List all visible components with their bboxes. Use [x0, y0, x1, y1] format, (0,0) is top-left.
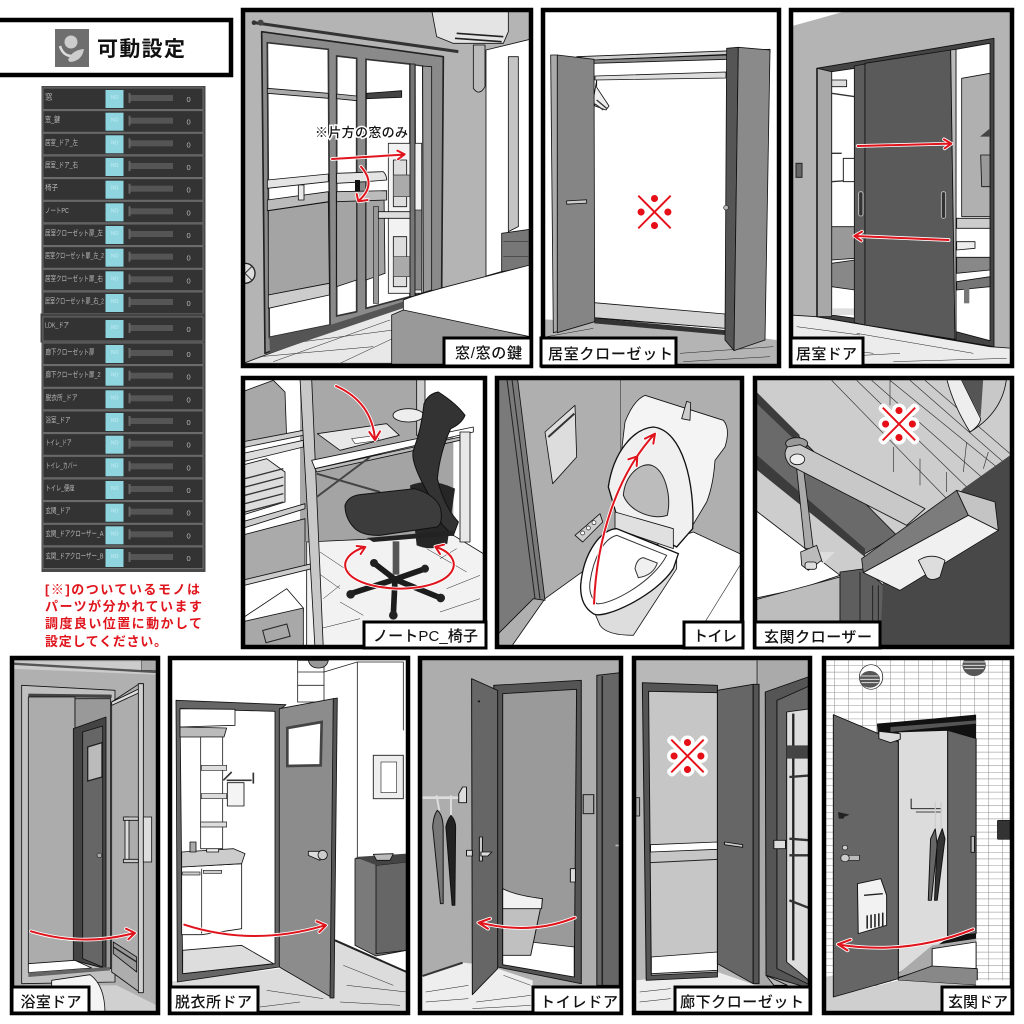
red note: [※]のついているモノは: [45, 582, 200, 597]
row: 廊下クローゼット扉: [43, 343, 203, 364]
row: ノートPC: NO: [111, 208, 119, 214]
label: 浴室ドア: 浴室ドア: [20, 994, 82, 1011]
row: ノートPC: [43, 201, 203, 223]
lamp base: [393, 409, 424, 422]
door: [279, 698, 337, 998]
row: 居室_ドア_右: NO: [111, 163, 119, 169]
row: 椅子: NO: [111, 186, 119, 192]
right opening view: [956, 43, 990, 341]
left opening view: [832, 68, 855, 318]
panel: hallway closet: [632, 657, 813, 1014]
row: 窓: 0: [186, 95, 191, 104]
right folding door: [724, 47, 770, 351]
label: 脱衣所ドア: [170, 987, 258, 1013]
door closer: [879, 731, 900, 743]
row: 居室クローゼット扉_左_2: 居室クローゼット扉_左_2: [45, 250, 104, 260]
row: 浴室_ドア: 0: [186, 418, 191, 427]
title: [0, 20, 231, 75]
row: トイレ_カバー: [43, 456, 203, 478]
row: トイレ_カバー: トイレ_カバー: [46, 461, 78, 470]
arrow: lid raise: [594, 434, 655, 604]
washroom interior: [180, 709, 275, 974]
row: 窓_鍵: [43, 111, 203, 132]
wall tile lines: [832, 380, 1010, 500]
row: 窓_鍵: 0: [186, 118, 191, 127]
row: 廊下クローゼット扉: 廊下クローゼット扉: [46, 346, 95, 356]
raised seat: [608, 427, 693, 549]
red note: 調度良い位置に動かして: [45, 616, 202, 631]
row: 居室クローゼット扉_右_2: 0: [186, 299, 191, 308]
panel: window and window lock: [235, 10, 531, 367]
label: 玄関ドア: [942, 987, 1012, 1013]
panel: morph slider list: [40, 86, 206, 572]
row: 玄関_ドア: [43, 502, 203, 523]
door: [467, 679, 498, 995]
row: 廊下クローゼット扉: NO: [111, 350, 119, 356]
paper holder: [545, 405, 577, 484]
icon: intercom: [998, 820, 1010, 839]
vent hood: [947, 377, 1007, 432]
row: 廊下クローゼット扉: 0: [186, 350, 191, 359]
row: 居室クローゼット扉_右: 0: [186, 276, 191, 285]
row: トイレ_ドア: NO: [111, 441, 119, 447]
row: 玄関_ドアクローザー_A: [43, 524, 203, 546]
laptop: [317, 424, 399, 450]
arrow: door swing: [31, 929, 135, 940]
title: 可動設定: [97, 38, 185, 61]
row: トイレ_ドア: トイレ_ドア: [46, 438, 72, 447]
row: 浴室_ドア: NO: [111, 418, 119, 424]
neighbouring door: [597, 673, 620, 985]
red note: [45, 582, 202, 649]
row: 居室クローゼット扉_左_2: NO: [111, 254, 119, 260]
glass door: [765, 676, 811, 989]
inner door: [73, 717, 106, 969]
label: 玄関クローザー: [755, 622, 880, 648]
row: 廊下クローゼット扉_2: NO: [111, 373, 119, 379]
picture frame: [373, 755, 403, 799]
vents: [859, 655, 986, 689]
row: 窓_鍵: 窓_鍵: [45, 114, 60, 124]
row: 浴室_ドア: 浴室_ドア: [46, 414, 70, 424]
row: 居室クローゼット扉_左: [43, 224, 203, 246]
row: 居室_ドア_左: 居室_ドア_左: [45, 137, 78, 147]
label: 玄関クローザー: 玄関クローザー: [764, 629, 872, 646]
row: トイレ_カバー: 0: [186, 463, 191, 472]
panel: entrance door closer: [753, 377, 1017, 649]
umbrella rack: [423, 787, 467, 905]
row: LDK_ドア: 0: [186, 325, 191, 334]
row: 居室_ドア_左: 0: [186, 140, 191, 149]
label: トイレ: [684, 622, 743, 648]
row: 玄関_ドアクローザー_B: NO: [111, 554, 119, 560]
label: ノートPC_椅子: ノートPC_椅子: [373, 627, 478, 645]
laundry hanger: [367, 91, 402, 99]
outdoor units: [378, 64, 422, 297]
row: 居室クローゼット扉_左: NO: [111, 231, 119, 237]
curtain rail: [252, 20, 458, 52]
row: 窓: NO: [111, 95, 119, 101]
arrow: chair rotation: [345, 545, 454, 589]
reference mark: ※: [876, 399, 922, 452]
row: トイレ_便座: トイレ_便座: [46, 482, 75, 492]
panel: bedroom closet: [540, 7, 783, 367]
row: トイレ_便座: NO: [111, 486, 119, 492]
arrow: slide right: [858, 139, 951, 148]
label: 脱衣所ドア: 脱衣所ドア: [175, 994, 252, 1011]
row: 玄関_ドアクローザー_A: NO: [111, 531, 119, 537]
row: 玄関_ドア: 玄関_ドア: [46, 505, 70, 515]
bed: [392, 265, 530, 367]
row: 居室クローゼット扉_右_2: NO: [111, 299, 119, 305]
row: 脱衣所_ドア: 脱衣所_ドア: [46, 392, 78, 402]
panel: entrance door: [821, 655, 1015, 1014]
label: 浴室ドア: [12, 987, 89, 1013]
row: 居室_ドア_右: [43, 156, 203, 178]
label: 廊下クローゼット: 廊下クローゼット: [680, 994, 804, 1011]
label: ノートPC_椅子: [364, 622, 486, 648]
label: トイレドア: [533, 987, 621, 1013]
row: 廊下クローゼット扉_2: 廊下クローゼット扉_2: [46, 369, 100, 379]
row: LDK_ドア: LDK_ドア: [45, 320, 69, 330]
arrow: slide left: [854, 232, 949, 241]
row: 居室クローゼット扉_左: 0: [186, 231, 191, 240]
row: トイレ_便座: 0: [186, 486, 191, 495]
toilet tank: [617, 395, 727, 535]
window frame: [262, 32, 443, 353]
icon: wall switch: [583, 795, 594, 814]
row: 窓: [43, 88, 203, 110]
sliding door leaves: [854, 49, 956, 339]
row: 玄関_ドアクローザー_A: 0: [186, 531, 191, 540]
panel: toilet: [495, 377, 745, 649]
row: 玄関_ドア: 0: [186, 509, 191, 518]
closer body: [862, 490, 998, 590]
panel: toilet door: [418, 657, 624, 1014]
arrow: door swing: [184, 921, 326, 936]
label: 廊下クローゼット: [675, 987, 810, 1013]
label: トイレ: トイレ: [693, 628, 737, 645]
rod: [797, 467, 822, 570]
row: 玄関_ドアクローザー_B: 玄関_ドアクローザー_B: [46, 550, 104, 560]
floor: [90, 985, 157, 1014]
row: 脱衣所_ドア: NO: [111, 395, 119, 401]
label: 窓/窓の鍵: [444, 338, 531, 366]
red note: パーツが分かれています: [45, 599, 202, 614]
label: 窓/窓の鍵: 窓/窓の鍵: [455, 344, 522, 362]
row: 玄関_ドア: NO: [111, 509, 119, 515]
mailbox: [857, 879, 887, 934]
panel: laptop and chair: [242, 377, 487, 649]
row: トイレ_ドア: [43, 434, 203, 455]
hanger: [593, 80, 609, 110]
reference mark: ※: [664, 731, 711, 784]
row: 玄関_ドアクローザー_B: 0: [186, 554, 191, 563]
door jamb: [497, 377, 545, 635]
door: [833, 715, 898, 997]
left folding door: [551, 55, 595, 333]
row: 椅子: 0: [186, 186, 191, 195]
icon: air conditioner: [432, 10, 508, 92]
row: 居室_ドア_右: 0: [186, 163, 191, 172]
row: ノートPC: 0: [186, 208, 191, 217]
label: 玄関ドア: 玄関ドア: [948, 994, 1008, 1011]
row: 居室クローゼット扉_右_2: [43, 292, 203, 314]
row: トイレ_便座: [43, 479, 203, 500]
reference mark: ※: [631, 187, 678, 240]
row: 居室_ドア_右: 居室_ドア_右: [45, 160, 78, 170]
panel: dressing room door: [167, 657, 410, 1014]
panel: bedroom sliding door: [790, 7, 1017, 367]
row: LDK_ドア: NO: [111, 325, 119, 331]
icon: movable figure: [55, 29, 89, 67]
row: 居室_ドア_左: NO: [111, 140, 119, 146]
row: 居室クローゼット扉_右_2: 居室クローゼット扉_右_2: [45, 296, 104, 306]
row: 椅子: [43, 179, 203, 200]
label: 居室ドア: [791, 338, 863, 366]
arm: [785, 438, 925, 525]
arrow: window slide: [332, 151, 405, 159]
label: 居室ドア: 居室ドア: [796, 346, 857, 363]
row: 脱衣所_ドア: 0: [186, 395, 191, 404]
red note: 設定してください。: [45, 634, 167, 649]
desk: [312, 427, 473, 542]
row: 脱衣所_ドア: [43, 388, 203, 410]
label: 居室クローゼット: 居室クローゼット: [548, 346, 673, 363]
row: 玄関_ドアクローザー_B: [43, 547, 203, 568]
icon: vent fan: [245, 262, 256, 284]
row: 椅子: 椅子: [45, 182, 58, 192]
toilet bowl: [581, 529, 678, 635]
icon: wall switch: [796, 163, 802, 177]
clothes rod: [595, 72, 726, 80]
row: 居室クローゼット扉_右: [43, 269, 203, 291]
arrow: door swing: [479, 918, 575, 929]
side cabinet: [355, 854, 407, 956]
door frame: [176, 700, 286, 982]
row: 窓: 窓: [45, 92, 53, 102]
row: 浴室_ドア: [43, 411, 203, 432]
arrow: door swing: [838, 929, 973, 950]
row: 窓_鍵: NO: [111, 118, 119, 124]
row: 居室クローゼット扉_左_2: [43, 247, 203, 268]
open folding door: [112, 684, 152, 993]
label: 居室クローゼット: [541, 338, 676, 366]
row: 玄関_ドアクローザー_A: 玄関_ドアクローザー_A: [46, 528, 104, 538]
row: 廊下クローゼット扉_2: [43, 366, 203, 387]
row: 居室_ドア_左: [43, 133, 203, 155]
shelf unit: [242, 379, 323, 649]
row: ノートPC: ノートPC: [45, 206, 69, 215]
panel: bathroom door: [10, 657, 160, 1014]
note: one window only: ※片方の窓のみ: [315, 125, 408, 140]
row: 居室クローゼット扉_左: 居室クローゼット扉_左: [45, 228, 103, 238]
arrow: laptop hinge: [336, 386, 380, 440]
label: トイレドア: トイレドア: [540, 994, 618, 1011]
row: トイレ_ドア: 0: [186, 441, 191, 450]
row: 居室クローゼット扉_左_2: 0: [186, 254, 191, 263]
row: トイレ_カバー: NO: [111, 463, 119, 469]
umbrellas: [911, 799, 975, 900]
arrow: lock rotation: [355, 167, 369, 201]
row: 居室クローゼット扉_右: NO: [111, 276, 119, 282]
visible toilet: [503, 869, 575, 955]
closet door: [717, 684, 759, 984]
row: LDK_ドア: [40, 314, 206, 342]
row: 廊下クローゼット扉_2: 0: [186, 373, 191, 382]
remote: [575, 514, 603, 542]
row: 居室クローゼット扉_右: 居室クローゼット扉_右: [45, 273, 103, 283]
office chair: [345, 392, 465, 620]
